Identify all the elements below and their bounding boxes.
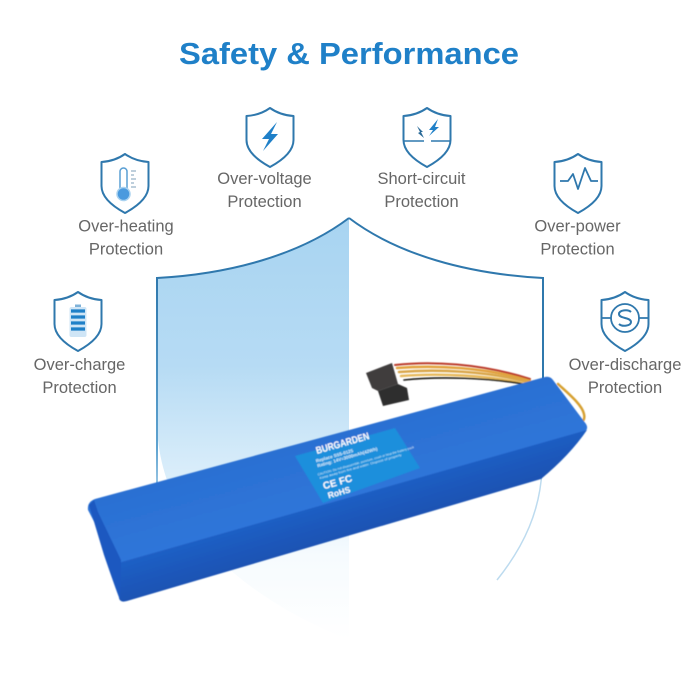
battery end cap	[89, 500, 121, 600]
label: over-power: Protection	[540, 240, 615, 258]
icon: over-discharge shield	[601, 292, 649, 351]
battery top face	[88, 377, 587, 564]
battery front face	[118, 430, 587, 602]
connector lower block	[378, 384, 409, 406]
label: over-charge: Over-charge	[34, 356, 125, 374]
large background shield	[157, 218, 543, 640]
sticker text: CE FC	[322, 473, 354, 492]
label: over-voltage	[217, 170, 312, 211]
connector upper block	[366, 363, 398, 391]
label: over-charge	[34, 356, 125, 397]
label: over-heating	[78, 218, 174, 258]
label: over-voltage: Protection	[227, 193, 302, 211]
sticker text: CAUTION: Do not disassemble, puncture, crush or heat the battery pack	[317, 445, 415, 477]
label: over-power: Over-power	[534, 218, 621, 236]
label: short-circuit: Protection	[384, 193, 459, 211]
icon: over-heating shield	[102, 154, 148, 213]
sticker text	[310, 420, 422, 502]
title: Safety & Performance	[179, 36, 519, 71]
wires	[395, 363, 584, 422]
label: over-power	[534, 218, 621, 258]
sticker text: RoHS	[327, 484, 352, 500]
sticker text: Keep away from fire and water. Dispose of properly	[319, 453, 403, 480]
sticker text: Rating: 14V=3000mAh(42Wh)	[317, 446, 378, 468]
label: over-charge: Protection	[42, 379, 117, 397]
icon: over-power shield	[554, 154, 602, 213]
label: over-discharge: Protection	[588, 379, 662, 397]
label: short-circuit	[377, 170, 466, 211]
label: over-heating: Protection	[89, 240, 163, 258]
label: short-circuit: Short-circuit	[377, 170, 466, 188]
shield left half	[157, 218, 349, 640]
icon: over-charge shield	[54, 292, 102, 351]
sticker text: Replace SS5-0125	[315, 448, 354, 463]
label: over-voltage: Over-voltage	[217, 170, 312, 188]
label: over-heating: Over-heating	[78, 218, 174, 236]
sticker text: BURGARDEN	[315, 431, 371, 457]
label: over-discharge	[569, 356, 681, 397]
label: over-discharge: Over-discharge	[569, 356, 681, 374]
connector	[366, 363, 409, 406]
battery with connector and wires	[88, 363, 587, 602]
icon: short-circuit shield	[404, 108, 450, 167]
label sticker	[295, 420, 422, 503]
icon: over-voltage shield	[246, 108, 294, 167]
shield outline	[157, 218, 543, 580]
